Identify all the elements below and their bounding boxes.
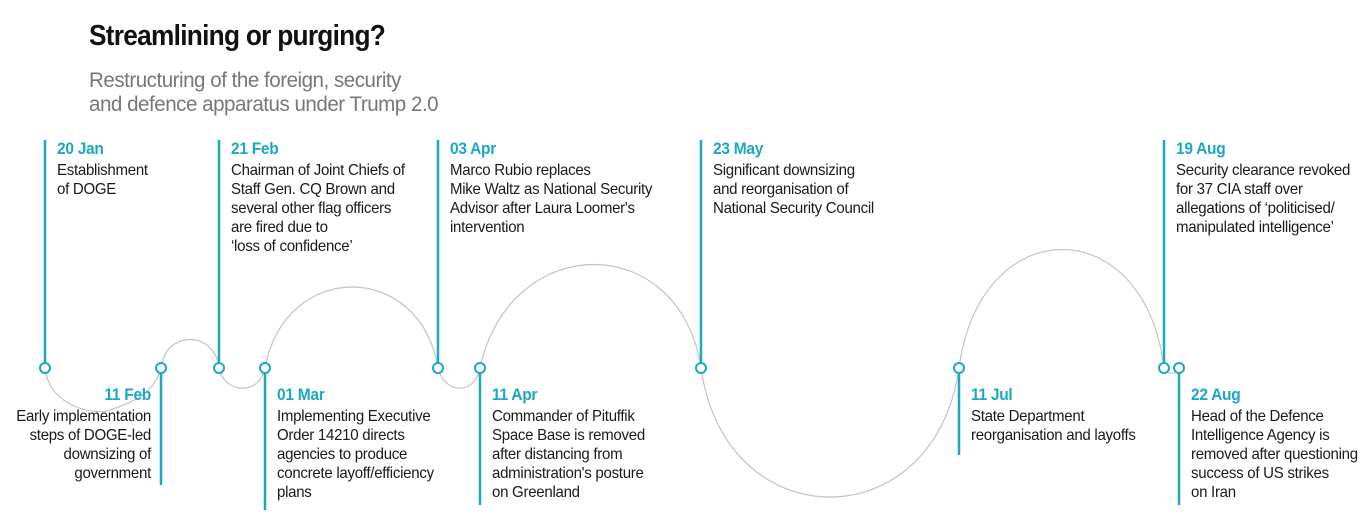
event: 11 Feb: 11 Feb <box>104 386 151 404</box>
event: 23 May: 23 May <box>713 140 763 158</box>
event: 11 Apr: after distancing from <box>492 446 622 463</box>
event: 22 Aug: success of US strikes <box>1191 465 1329 482</box>
event: 03 Apr: Marco Rubio replaces <box>450 162 591 179</box>
event: 11 Feb <box>16 386 152 482</box>
event: 03 Apr: 03 Apr <box>450 140 496 158</box>
event: 22 Aug: on Iran <box>1191 484 1236 501</box>
subtitle: and defence apparatus under Trump 2.0 <box>89 93 438 116</box>
event: 01 Mar: 01 Mar <box>277 386 324 404</box>
event: 23 May: Significant downsizing <box>713 162 855 179</box>
event: 19 Aug: manipulated intelligence’ <box>1176 219 1334 236</box>
event: 19 Aug <box>1176 140 1350 236</box>
event: 11 Feb: steps of DOGE-led <box>30 427 151 444</box>
event: 11 Apr: administration's posture <box>492 465 644 482</box>
event: 01 Mar: plans <box>277 484 312 501</box>
event: 03 Apr: Mike Waltz as National Security <box>450 181 652 198</box>
event: 21 Feb: Chairman of Joint Chiefs of <box>231 162 405 179</box>
event: 19 Aug: 19 Aug <box>1176 140 1225 158</box>
subtitle: Restructuring of the foreign, security <box>89 69 401 92</box>
event: 21 Feb: are fired due to <box>231 219 328 236</box>
event: 11 Feb: government <box>74 465 151 482</box>
event: 23 May: and reorganisation of <box>713 181 848 198</box>
title: Streamlining or purging? <box>89 20 385 52</box>
event: 11 Apr: on Greenland <box>492 484 580 501</box>
event: 19 Aug: for 37 CIA staff over <box>1176 181 1303 198</box>
event: 19 Aug: Security clearance revoked <box>1176 162 1350 179</box>
event: 22 Aug: Head of the Defence <box>1191 408 1324 425</box>
event: 01 Mar: Order 14210 directs <box>277 427 405 444</box>
event: 20 Jan: Establishment <box>57 162 148 179</box>
wavy path <box>45 250 1179 497</box>
event: 01 Mar: concrete layoff/efficiency <box>277 465 434 482</box>
event: 11 Jul: 11 Jul <box>971 386 1012 404</box>
event: 11 Jul <box>971 386 1136 444</box>
event: 01 Mar: Implementing Executive <box>277 408 430 425</box>
event: 11 Jul: State Department <box>971 408 1084 425</box>
event: 22 Aug: removed after questioning <box>1191 446 1358 463</box>
event: 21 Feb: 21 Feb <box>231 140 278 158</box>
event: 11 Feb: Early implementation <box>16 408 151 425</box>
event: 03 Apr: intervention <box>450 219 524 236</box>
event: 22 Aug: 22 Aug <box>1191 386 1240 404</box>
event: 11 Feb: downsizing of <box>64 446 151 463</box>
event: 19 Aug: allegations of ‘politicised/ <box>1176 200 1334 217</box>
event: 11 Apr: Space Base is removed <box>492 427 645 444</box>
event: 01 Mar <box>277 386 434 501</box>
event: 01 Mar: agencies to produce <box>277 446 407 463</box>
event: 20 Jan <box>57 140 148 198</box>
event: 03 Apr: Advisor after Laura Loomer's <box>450 200 635 217</box>
event: 11 Apr: 11 Apr <box>492 386 537 404</box>
event: 20 Jan: 20 Jan <box>57 140 104 158</box>
event: 20 Jan: of DOGE <box>57 181 116 198</box>
event: 21 Feb: Staff Gen. CQ Brown and <box>231 181 395 198</box>
event: 22 Aug: Intelligence Agency is <box>1191 427 1329 444</box>
event: 23 May: National Security Council <box>713 200 874 217</box>
event: 11 Jul: reorganisation and layoffs <box>971 427 1136 444</box>
event: 21 Feb: several other flag officers <box>231 200 391 217</box>
subtitle <box>89 69 438 116</box>
event: 11 Apr <box>492 386 645 501</box>
event: 11 Apr: Commander of Pituffik <box>492 408 635 425</box>
event: 21 Feb: ‘loss of confidence’ <box>231 238 352 255</box>
event: 23 May <box>713 140 874 217</box>
event: 03 Apr <box>450 140 652 236</box>
event: 22 Aug <box>1191 386 1358 501</box>
event: 21 Feb <box>231 140 406 255</box>
